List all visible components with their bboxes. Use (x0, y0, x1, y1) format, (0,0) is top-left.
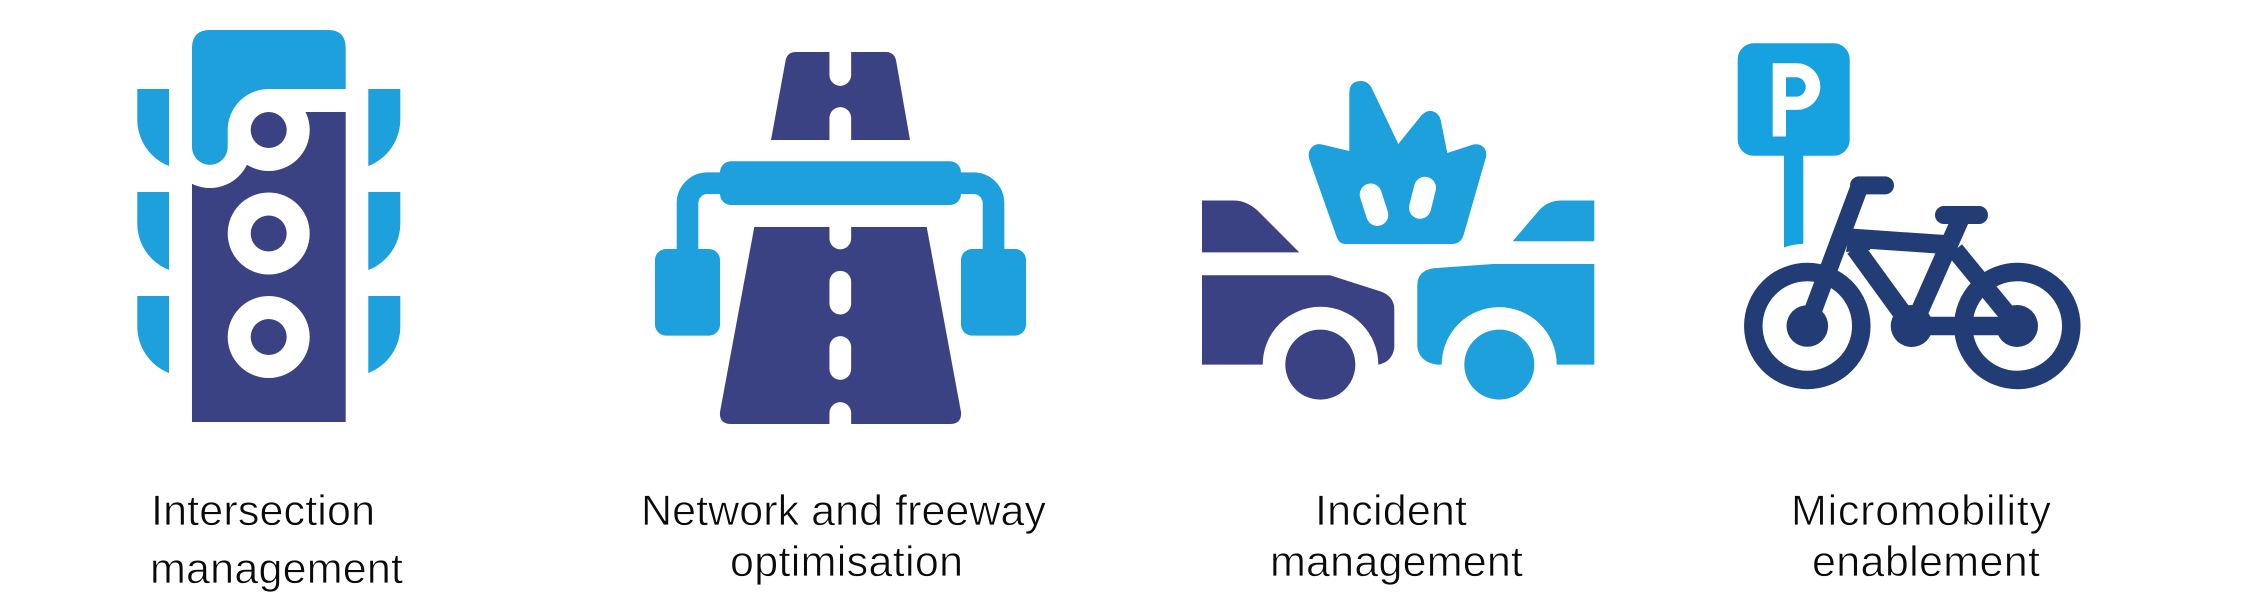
caption: network and freeway optimisation (641, 487, 1046, 586)
caption: micromobility enablement: enablement (1812, 538, 2040, 586)
icon: road with overhead gantry (655, 40, 1026, 440)
caption: intersection management (150, 487, 403, 593)
caption: micromobility enablement (1791, 487, 2052, 586)
caption: network and freeway optimisation: optimisation (730, 538, 963, 586)
caption: incident management: Incident (1315, 487, 1467, 535)
panel: network and freeway optimisation (641, 40, 1046, 586)
panel: incident management (1202, 81, 1594, 586)
caption: incident management: management (1270, 538, 1523, 586)
icon: traffic light (137, 30, 400, 422)
icon: parking sign (1738, 43, 1850, 247)
panel: micromobility enablement (1738, 43, 2071, 586)
icon: bicycle (1753, 185, 2071, 380)
caption: incident management (1270, 487, 1523, 586)
icon: two-car collision (1202, 81, 1594, 400)
caption: intersection management: management (150, 545, 403, 593)
panel: intersection management (137, 30, 403, 593)
caption: network and freeway optimisation: Network and freeway (641, 487, 1046, 535)
caption: micromobility enablement: Micromobility (1791, 487, 2052, 535)
caption: intersection management: Intersection (151, 487, 375, 535)
